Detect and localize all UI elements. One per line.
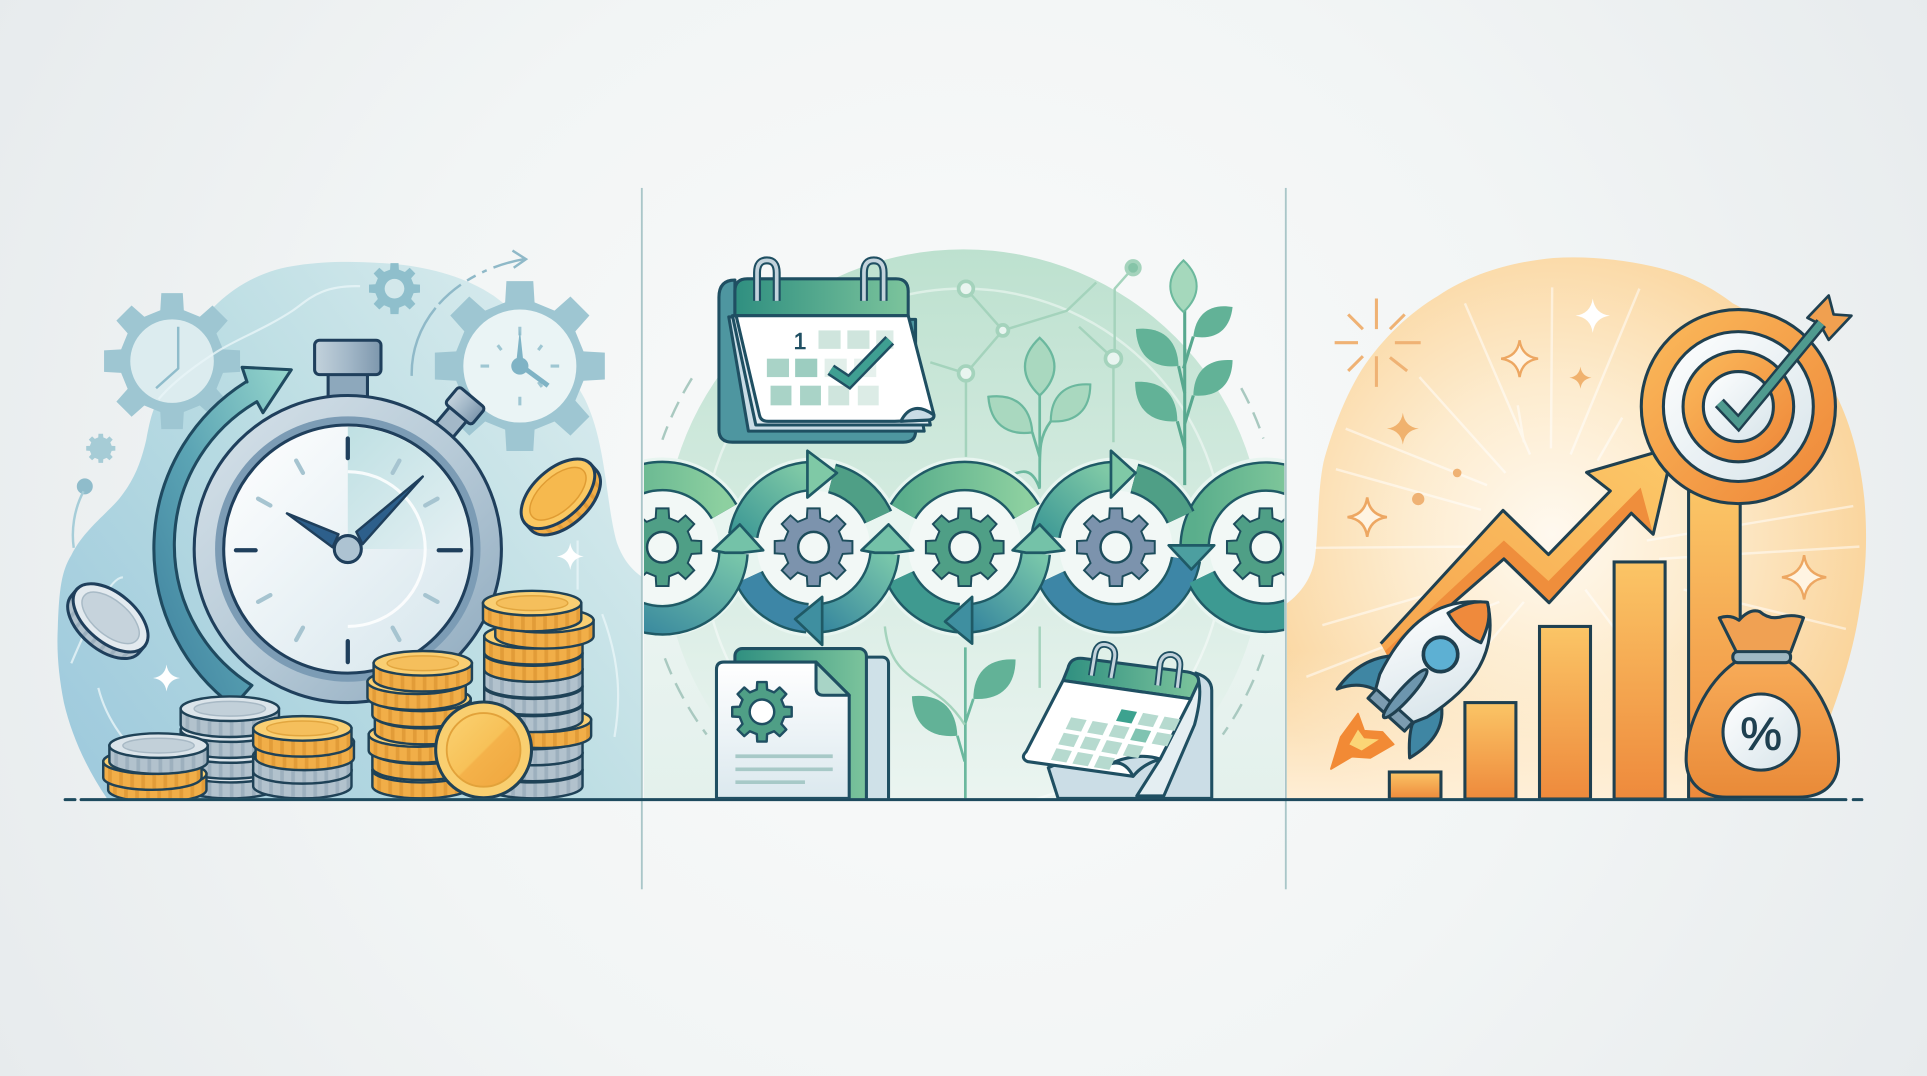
calendar second page <box>732 316 930 425</box>
minor tick marks <box>258 461 438 640</box>
stopwatch crown <box>315 340 381 402</box>
target <box>1641 310 1835 504</box>
calendar lower pages <box>729 316 924 431</box>
target outer ring <box>1641 310 1835 504</box>
back sheets <box>787 657 889 811</box>
plain top arcs <box>601 476 1327 553</box>
gear clock: right background gear with clock <box>435 281 605 451</box>
dark green back arcs <box>832 478 1181 517</box>
ground line <box>65 798 1862 801</box>
calendar with checkmark <box>719 260 934 442</box>
calendar sheet <box>1023 680 1191 776</box>
rocket window <box>1416 630 1465 679</box>
document fold <box>816 662 849 695</box>
icon: pin dot with line <box>73 478 93 548</box>
rocket centre fin <box>1379 666 1431 722</box>
green circle backdrop <box>677 249 1250 664</box>
sweep arrow around stopwatch <box>154 367 291 706</box>
bar chart <box>1389 491 1740 799</box>
panel: continuous process <box>644 249 1284 798</box>
centre hub <box>334 536 361 563</box>
coin stack: short mixed <box>253 716 354 798</box>
arrow heads <box>713 451 1214 645</box>
clock hands <box>287 477 423 547</box>
outer case <box>194 396 501 703</box>
big front coin <box>436 702 532 798</box>
dashed curved arrow <box>412 251 526 376</box>
flying gold coin <box>520 458 602 536</box>
divider left <box>641 188 643 889</box>
highlighted quarter <box>348 427 470 549</box>
target orange ring <box>1683 351 1794 462</box>
tilted calendar <box>1023 644 1212 798</box>
calendar header <box>735 279 908 316</box>
blue bottom arcs <box>749 559 1330 618</box>
dots <box>1412 469 1461 505</box>
bar 2 <box>1465 703 1516 799</box>
rocket right fin <box>1409 706 1442 758</box>
gear: left background gear <box>104 293 240 429</box>
calendar rings <box>1091 644 1180 688</box>
plant: middle <box>987 336 1092 490</box>
target centre <box>1703 372 1773 442</box>
process gears <box>624 508 1305 586</box>
clock face <box>224 425 472 673</box>
coin stack: grey <box>181 696 279 798</box>
calendar side sheets <box>1137 673 1200 796</box>
network lines <box>930 268 1133 457</box>
growth arrow <box>1381 447 1673 658</box>
plant: tall right <box>1135 259 1233 486</box>
bag tie <box>1733 652 1791 663</box>
coin stack: tall gold <box>367 651 473 798</box>
back pages <box>1048 673 1212 798</box>
rocket <box>1354 576 1517 744</box>
major tick marks <box>236 439 461 662</box>
calendar page <box>736 316 934 421</box>
sparkles <box>1348 298 1826 599</box>
light rays <box>1306 287 1859 688</box>
calendar header <box>1063 658 1199 699</box>
stopwatch <box>194 396 501 703</box>
date cells <box>767 330 893 405</box>
arrow fletching <box>1807 296 1851 340</box>
money bag <box>1686 611 1839 797</box>
calendar rings <box>757 260 884 301</box>
stopwatch side button <box>436 386 486 438</box>
calendar curl <box>1110 756 1160 776</box>
rocket base <box>1368 689 1413 731</box>
calendar cells <box>1051 702 1180 777</box>
top arrow arcs <box>743 476 1112 536</box>
process chain of arrows and gears <box>591 451 1337 645</box>
bar 4 <box>1614 562 1665 799</box>
bag body <box>1686 662 1839 797</box>
document gear <box>732 682 792 742</box>
check arrow in target <box>1719 323 1821 423</box>
icon: puzzle flake <box>86 434 115 463</box>
infographic illustration <box>57 188 1866 890</box>
inner white orbit <box>703 289 1224 809</box>
blue blob backdrop <box>57 262 643 798</box>
rocket left fin <box>1337 656 1402 694</box>
document text lines <box>735 756 833 782</box>
bar 3 <box>1540 626 1591 799</box>
front document <box>716 662 849 798</box>
plant: bottom <box>885 626 1040 798</box>
rocket flame core <box>1349 730 1379 750</box>
rocket nose <box>1446 588 1504 646</box>
rocket body <box>1364 576 1517 733</box>
divider right <box>1285 188 1287 889</box>
green folder <box>735 649 866 808</box>
dashed orbit arcs <box>662 378 1263 735</box>
rising arcs <box>614 553 1036 620</box>
panel: time and money savings <box>55 251 643 802</box>
panel: growth and results <box>1285 257 1866 799</box>
flying silver coin <box>66 582 150 660</box>
gear: small top gear <box>369 263 420 314</box>
burst mark <box>1335 298 1421 387</box>
bar 1 <box>1389 772 1441 799</box>
percent sign: % <box>1740 707 1782 759</box>
bar 5 <box>1689 491 1740 799</box>
coin stack: left <box>103 733 208 802</box>
network nodes <box>959 261 1140 381</box>
document stack with gear <box>716 649 889 811</box>
calendar back cover <box>719 280 916 442</box>
sparkles <box>153 543 584 692</box>
panel tint <box>644 635 1284 798</box>
white flowing lines <box>71 286 618 786</box>
chain halo <box>591 476 1337 618</box>
coin stack: tall right <box>483 591 594 798</box>
checkmark <box>831 340 890 382</box>
rocket flame <box>1331 714 1394 769</box>
target white ring <box>1663 332 1813 481</box>
bag ruffle <box>1719 611 1803 652</box>
date number: 1 <box>794 328 807 354</box>
cream glow at base <box>1287 651 1778 798</box>
orange blob backdrop <box>1285 257 1866 798</box>
percent badge <box>1723 694 1799 770</box>
gear wells <box>606 491 1322 604</box>
calendar curled corner <box>901 408 934 421</box>
